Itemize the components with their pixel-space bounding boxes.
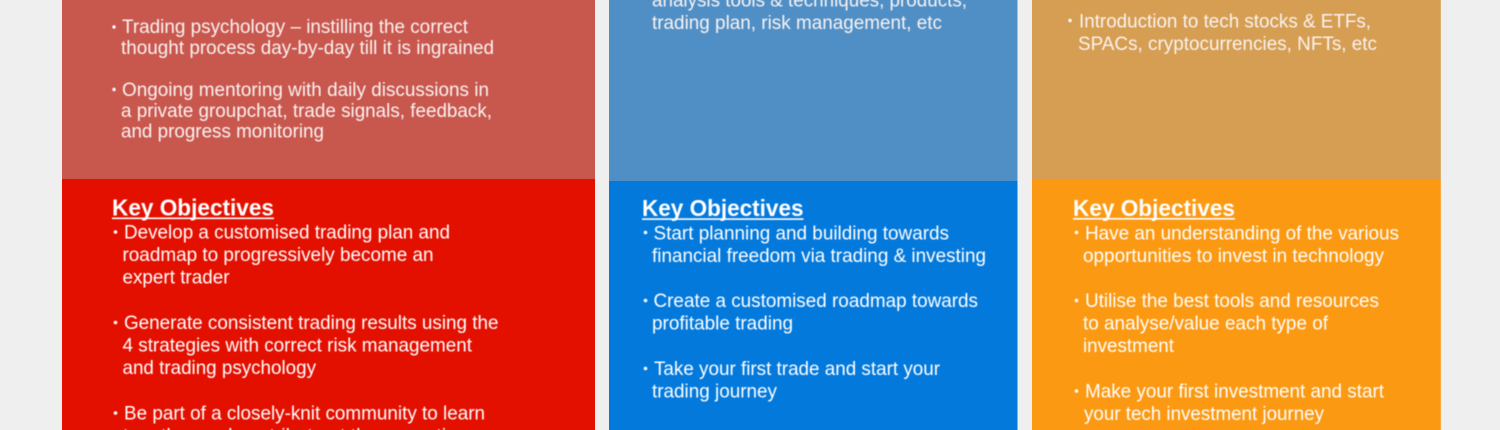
heading: red key objectives: Key Objectives — [112, 194, 274, 220]
text block: red objectives bullets: Generate consistent trading results using the — [124, 312, 498, 334]
text block: orange objectives bullets: Make your first investment and start — [1085, 380, 1385, 402]
blue upper section background — [609, 0, 1018, 181]
text block: orange objectives bullets: to analyse/value each type of — [1083, 312, 1329, 334]
text block: red objectives bullets: expert trader — [122, 266, 230, 288]
text block: orange objectives bullets — [1075, 222, 1399, 425]
red lower section background — [62, 179, 595, 430]
text block: red objectives bullets: and trading psychology — [122, 357, 316, 379]
text block: orange upper bullet: Introduction to tech stocks & ETFs, — [1079, 10, 1371, 32]
text block: blue objectives bullets: profitable trading — [652, 312, 793, 334]
text block: orange objectives bullets: your tech investment journey — [1084, 403, 1324, 425]
text block: blue objectives bullets: trading journey — [652, 380, 777, 402]
red upper section background — [62, 0, 595, 179]
blue lower section background — [609, 181, 1018, 430]
orange lower section background — [1032, 180, 1441, 430]
panel: orange column — [1032, 0, 1441, 430]
text block: red upper bullets: a private groupchat, trade signals, feedback, — [121, 100, 492, 122]
text block: red objectives bullets — [114, 222, 498, 430]
text block: red objectives bullets: roadmap to progressively become an — [122, 244, 434, 266]
text block: orange objectives bullets: Utilise the best tools and resources — [1085, 290, 1379, 312]
heading: orange key objectives: Key Objectives — [1073, 195, 1235, 221]
text block: blue upper bullet: trading plan, risk management, etc — [652, 12, 942, 34]
text block: orange objectives bullets: investment — [1083, 335, 1175, 357]
text block: red objectives bullets: 4 strategies with correct risk management — [122, 334, 473, 356]
text block: blue objectives bullets: financial freedom via trading & investing — [652, 245, 986, 267]
text block: orange objectives bullets: Have an understanding of the various — [1085, 222, 1399, 244]
text block: blue objectives bullets: Create a customised roadmap towards — [654, 290, 978, 312]
text block: red objectives bullets: Be part of a closely-knit community to learn — [124, 402, 485, 424]
text block: blue objectives bullets: Take your first trade and start your — [654, 358, 940, 380]
text block: blue upper bullet — [652, 0, 967, 34]
text block: blue objectives bullets — [644, 222, 986, 402]
text block: blue objectives bullets: Start planning and building towards — [654, 222, 949, 244]
text block: red upper bullets: thought process day-by-day till it is ingrained — [121, 37, 494, 59]
text block: red upper bullets: and progress monitoring — [121, 120, 324, 142]
text block: red upper bullets: Trading psychology – instilling the correct — [122, 16, 469, 38]
text block: red objectives bullets: Develop a customised trading plan and — [124, 222, 450, 244]
text block: red upper bullets: Ongoing mentoring with daily discussions in — [122, 79, 489, 101]
text block: orange objectives bullets: opportunities to invest in technology — [1083, 245, 1384, 267]
panel: blue column — [609, 0, 1018, 430]
text block: orange upper bullet — [1068, 10, 1377, 55]
text block: red upper bullets — [112, 16, 494, 142]
orange upper section background — [1032, 0, 1441, 180]
panel: red column — [62, 0, 595, 430]
heading: blue key objectives: Key Objectives — [642, 195, 804, 221]
text block: orange upper bullet: SPACs, cryptocurrencies, NFTs, etc — [1078, 33, 1377, 55]
